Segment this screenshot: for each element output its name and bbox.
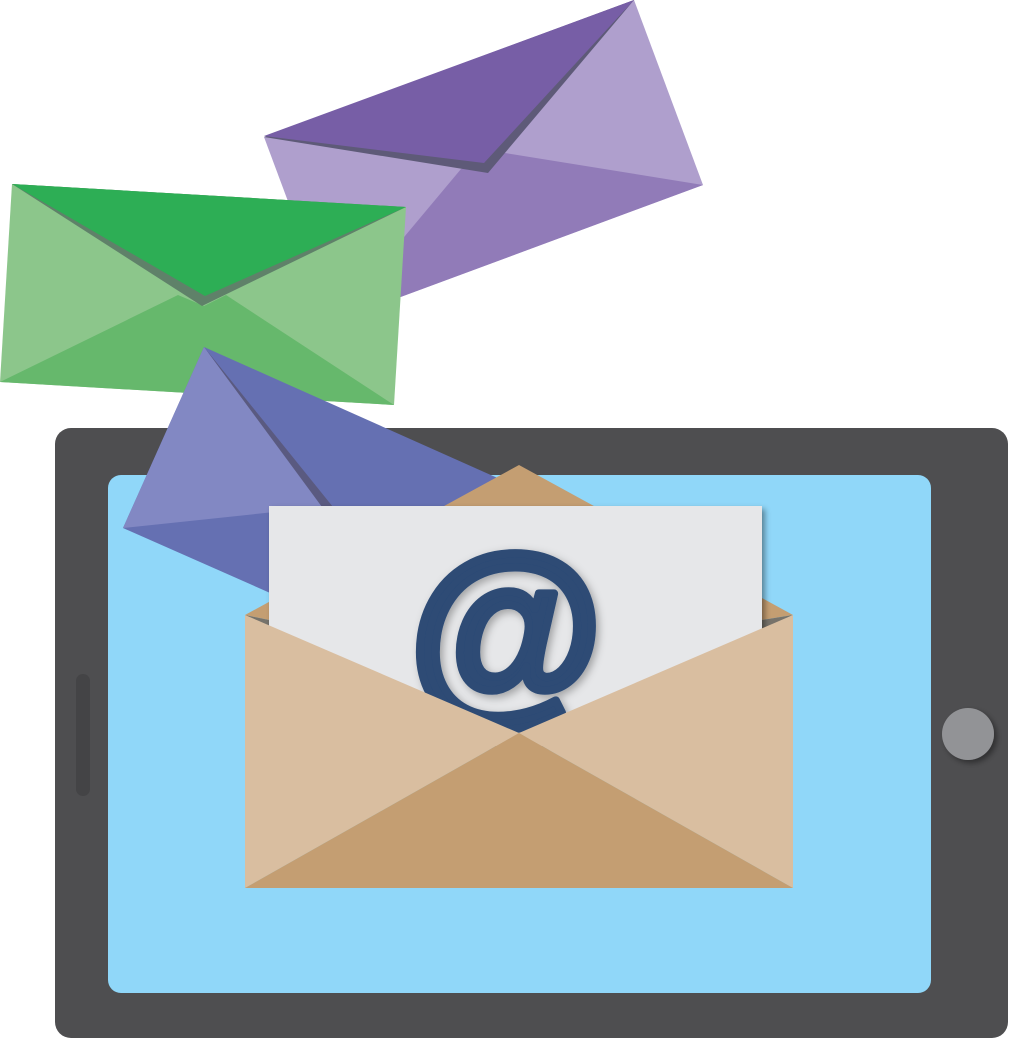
- at symbol: @: [409, 513, 603, 741]
- envelope bottom flap: [245, 733, 793, 888]
- envelope left flap: [245, 615, 519, 888]
- envelope: blue: [123, 347, 520, 668]
- envelope right flap: [519, 615, 793, 888]
- envelope back flap: [245, 465, 793, 620]
- tablet: [55, 428, 1008, 1038]
- letter sheet: [269, 506, 762, 746]
- envelope: purple: [264, 0, 703, 322]
- tablet screen: [108, 475, 931, 993]
- tablet side slot: [76, 674, 90, 796]
- envelope: open tan: [245, 465, 793, 888]
- tablet home button: [942, 708, 994, 760]
- envelope: green: [0, 184, 406, 405]
